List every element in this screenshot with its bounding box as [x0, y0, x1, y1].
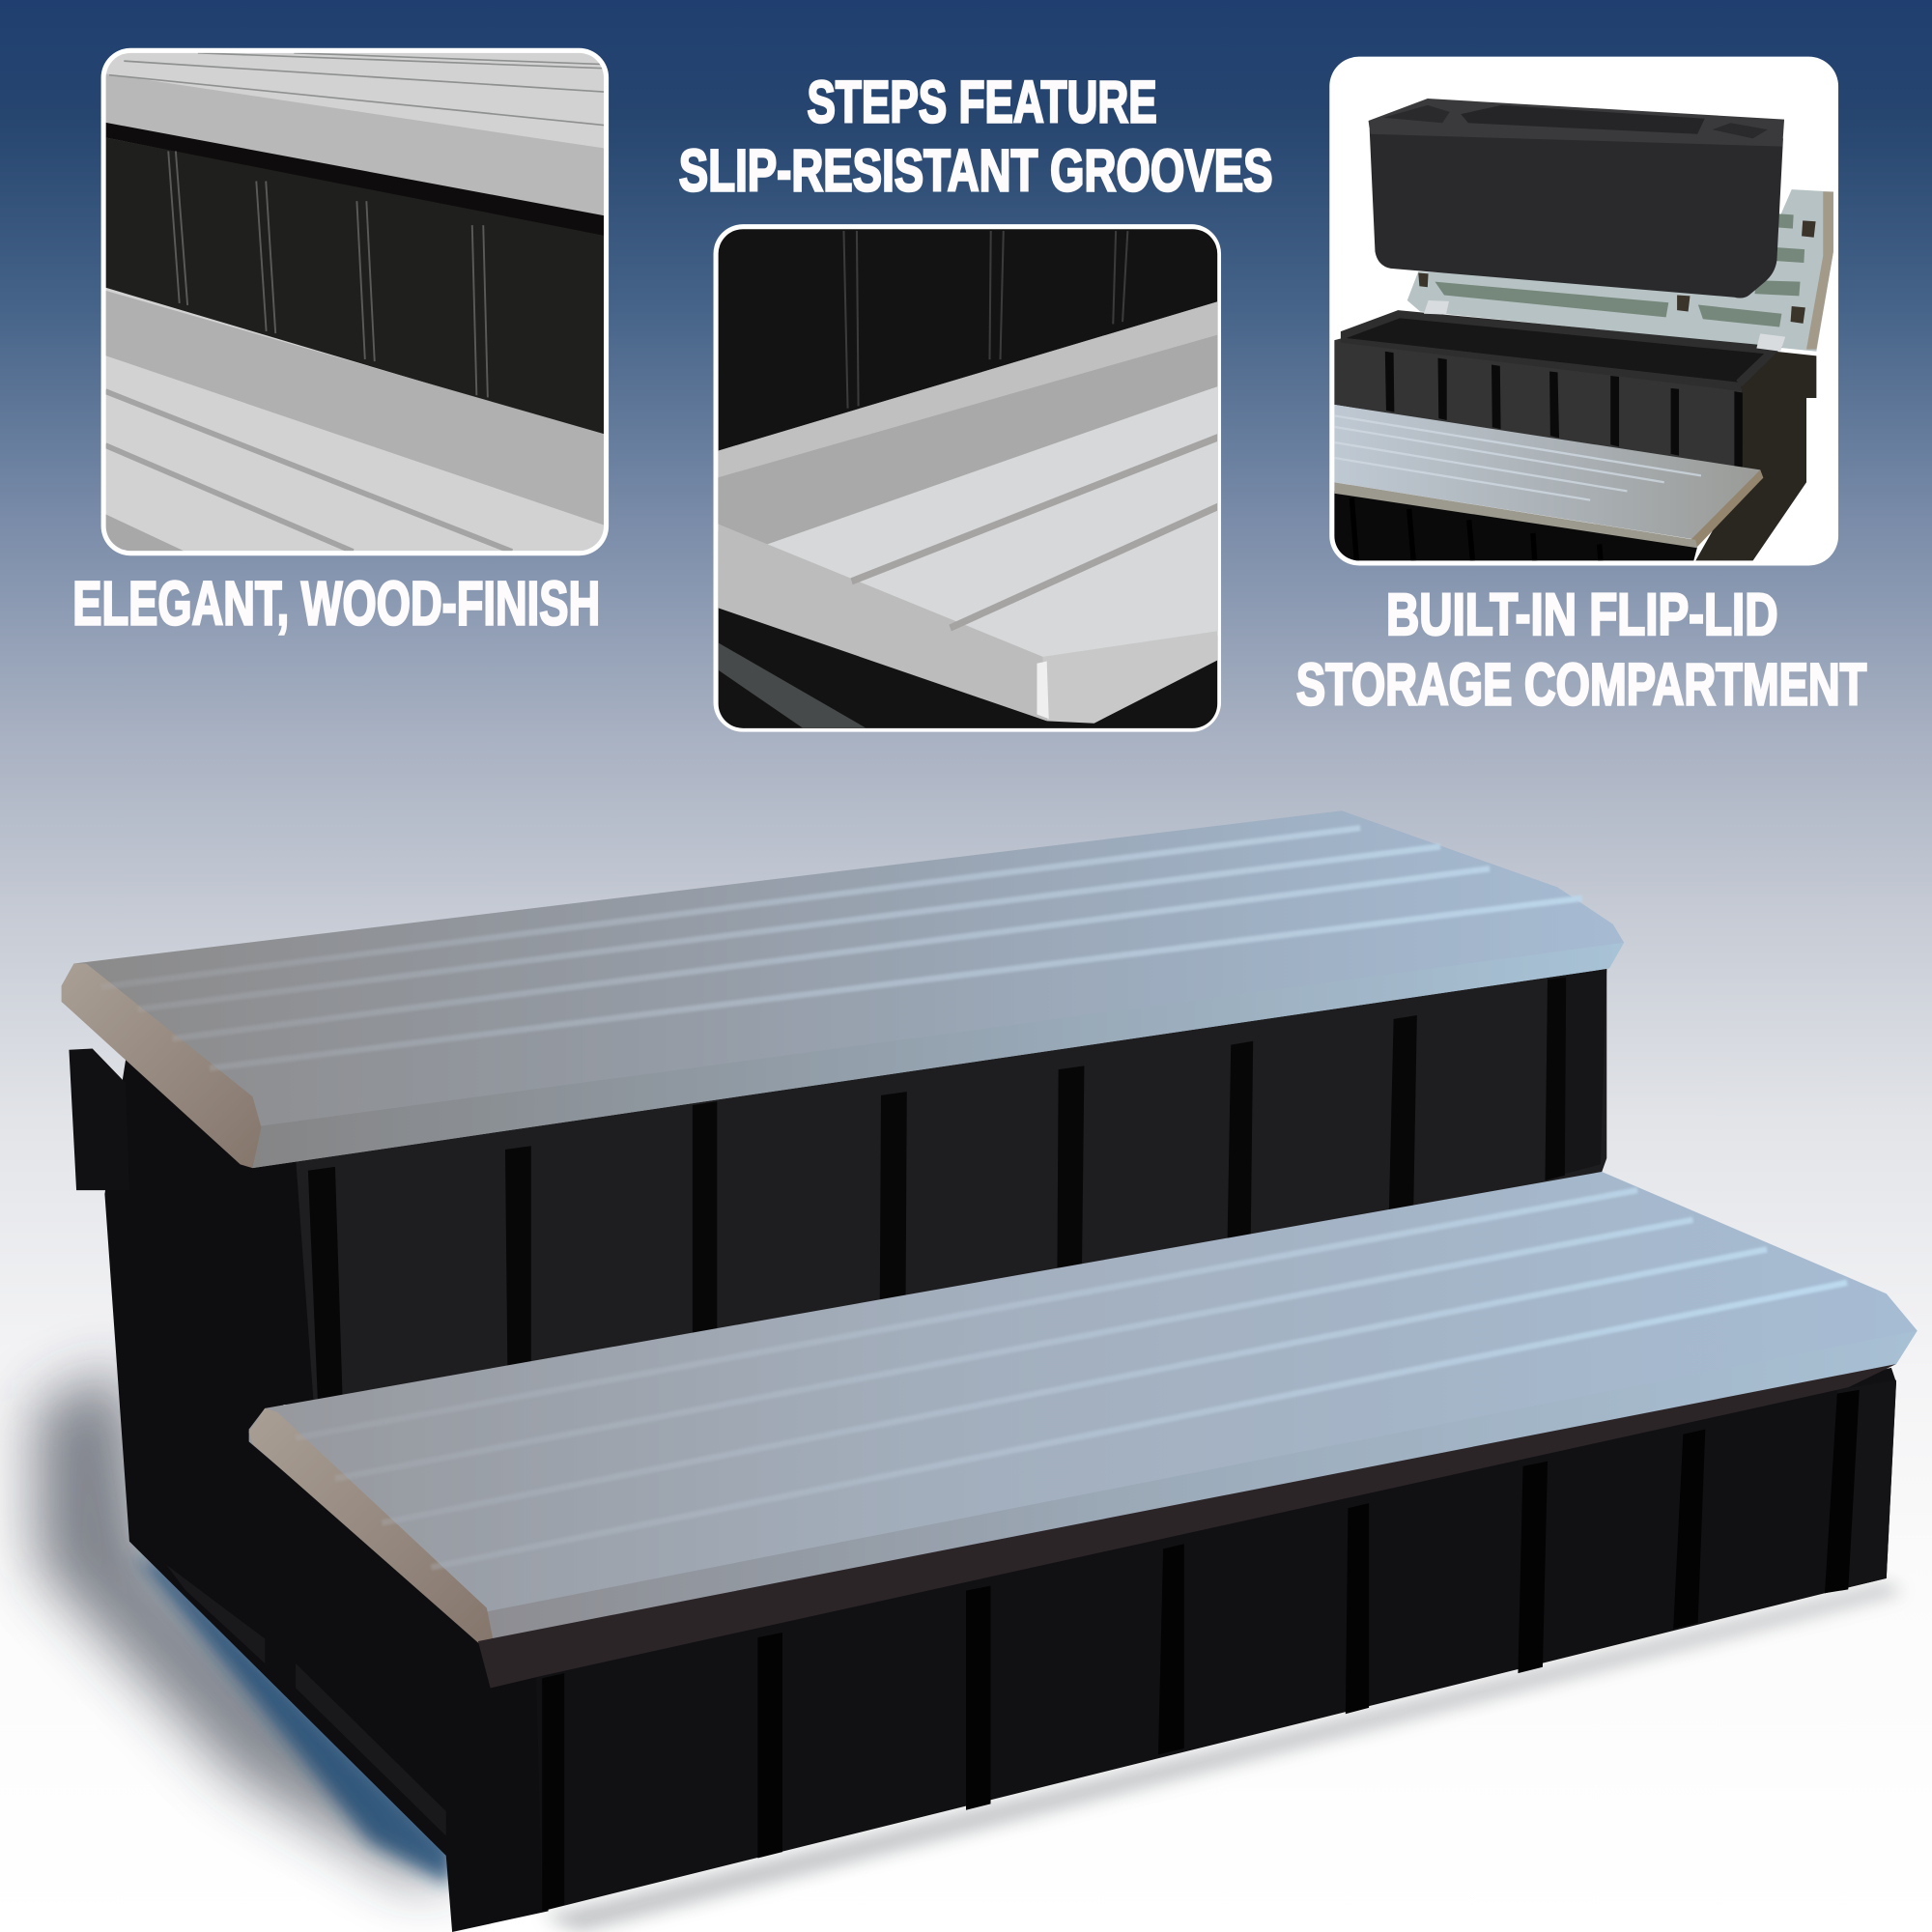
heading: steps feature line two: SLIP-RESISTANT GROOVES [679, 138, 1273, 204]
upper tread [62, 810, 1624, 1168]
panel: storage compartment close-up [1329, 57, 1838, 565]
close-up image: flip-lid storage [1334, 99, 1833, 561]
raised lid [1407, 189, 1833, 352]
upper riser panel [296, 961, 1606, 1410]
caption: wood finish: ELEGANT, WOOD-FINISH [72, 569, 600, 639]
left side wall of stairs [69, 1048, 549, 1932]
ground shadow [37, 1368, 1904, 1932]
open storage box [1334, 310, 1816, 561]
caption: storage line one: BUILT-IN FLIP-LID [1386, 582, 1778, 647]
main product: two-step spa stairs [37, 810, 1918, 1932]
hinges [1424, 300, 1785, 352]
panel: wood finish close-up [100, 48, 609, 556]
removable storage bin [1369, 99, 1784, 298]
lower riser panel [536, 1368, 1896, 1911]
lower tread [249, 1172, 1918, 1688]
heading: steps feature line one: STEPS FEATURE [807, 69, 1157, 134]
step tread in front of box [1334, 405, 1763, 548]
close-up image: groove detail [712, 222, 1224, 737]
close-up image: wood-finish step detail [106, 52, 604, 551]
panel: slip-resistant grooves close-up [712, 222, 1224, 737]
